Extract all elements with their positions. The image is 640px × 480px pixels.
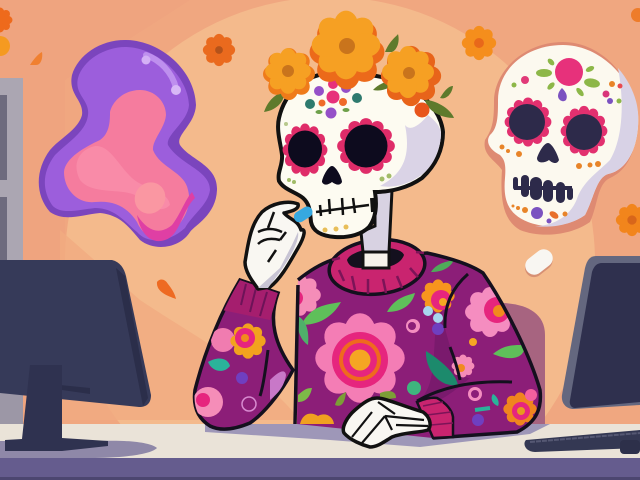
floating white pill [521,246,556,281]
left sleeve arm [193,280,293,429]
crown leaves [264,34,454,118]
big pink flower [315,313,405,403]
cuff flower [503,389,537,426]
right monitor [562,256,640,409]
skull shadow [485,42,637,235]
skull body [488,45,638,226]
right sleeve cuff [417,398,453,438]
sweater sleeve shading [424,312,470,399]
marigold crown [263,11,454,118]
right marigold [381,46,441,106]
shoulder flower [421,279,455,335]
center marigold [310,11,384,89]
right eye [561,106,607,156]
sweater torso [279,253,540,438]
left marigold [263,48,315,100]
forehead flower decoration [512,57,601,101]
sweater outline [298,253,540,438]
blob: purple brain-like shape [39,40,217,247]
left eye [283,124,327,176]
lower sleeve flower [193,387,223,417]
head shading [380,115,441,187]
window frame [0,78,23,425]
desk [0,424,640,480]
teeth [513,175,573,203]
right sleeve seam [417,274,512,401]
right eye [337,118,395,174]
small flower [452,355,474,377]
floating marigolds [0,8,640,236]
right sleeve flower [465,287,515,337]
falling petals [30,52,176,299]
dots [500,81,622,224]
sleeve leaf [208,359,230,371]
resting skeleton hand on desk [343,398,430,447]
chair back [500,303,545,424]
cheek and chin dots [284,122,392,232]
sweater collar [326,235,428,299]
monitor stand and base [5,365,108,451]
left monitor [0,260,151,407]
sleeve flower [211,323,266,359]
raised skeleton hand holding pill [245,202,315,289]
mouth and teeth [316,198,369,216]
leaves [297,260,525,426]
forehead dots [305,79,362,118]
sleeve cuff [222,280,278,320]
left torso flower [298,276,321,316]
keyboard and mouse [524,430,640,454]
thought skull: decorated sugar skull [485,42,638,235]
head base [278,73,443,237]
nose [322,166,342,185]
skeleton neck [361,190,392,268]
nose [537,143,559,163]
blue pill [292,204,315,224]
skull head [278,73,443,237]
left eye [505,97,551,147]
